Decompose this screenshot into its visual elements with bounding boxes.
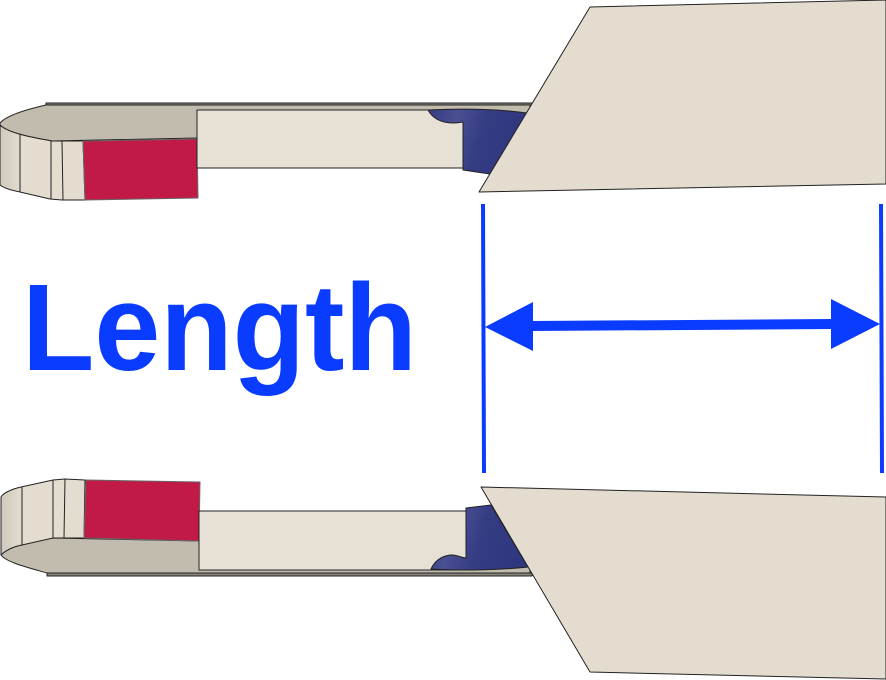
bottom fin bbox=[481, 487, 886, 679]
bottom light body panel bbox=[199, 511, 467, 570]
label: Length: Length bbox=[22, 259, 417, 397]
top red band bbox=[83, 139, 198, 200]
bottom blue fin root bbox=[431, 505, 528, 570]
top grey inner face bbox=[0, 105, 530, 141]
top nose section bbox=[0, 125, 85, 200]
top fin bbox=[479, 0, 886, 192]
double-headed arrow bbox=[485, 299, 880, 351]
bottom body tube bbox=[1, 479, 886, 679]
left extent line bbox=[481, 204, 486, 473]
bottom rail strip bbox=[47, 573, 532, 576]
top blue fin root bbox=[428, 109, 527, 174]
top body tube bbox=[0, 0, 886, 200]
bottom grey inner face bbox=[1, 538, 530, 573]
top rail strip bbox=[46, 103, 532, 106]
bottom red band bbox=[84, 480, 200, 541]
bottom nose section bbox=[1, 479, 85, 555]
top light body panel bbox=[197, 110, 465, 168]
length dimension marker bbox=[481, 204, 884, 473]
right extent line bbox=[879, 204, 884, 473]
